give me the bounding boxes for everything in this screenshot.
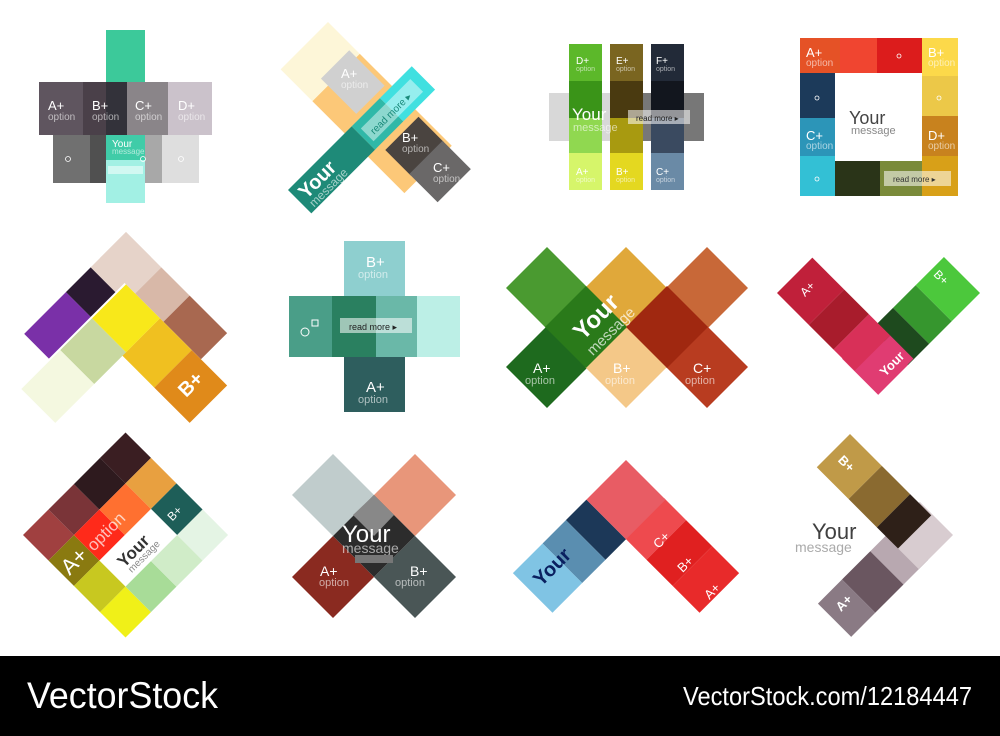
panel: graphic 2 crossing bands xyxy=(281,22,473,214)
panel: graphic 7 diamond X: A+ xyxy=(533,360,551,376)
panel: graphic 8 V check: A+ xyxy=(797,279,818,299)
panel: graphic 1 horizontal tiles: option xyxy=(48,112,75,123)
panel: graphic 12 chevron right: B+ xyxy=(835,452,858,475)
panel: graphic 12 chevron right: A+ xyxy=(833,591,855,614)
panel: graphic 9 rotated square frame: message xyxy=(126,539,163,575)
panel: graphic 11 chevron red blue: Your xyxy=(529,544,576,591)
panel: graphic 8 V check: B+ xyxy=(931,267,951,288)
panel: graphic 3 vertical columns: Your xyxy=(572,105,607,124)
footer: watermark bar xyxy=(0,656,1000,736)
panel: graphic 6 plus cross: read more ▸ xyxy=(349,322,398,332)
panel: graphic 11 chevron red blue: B+ xyxy=(674,553,696,575)
panel: graphic 2 crossing bands: read more ▸ xyxy=(369,91,414,137)
panel: graphic 3 vertical columns: message xyxy=(573,122,618,134)
panel: graphic 4 square frame: option xyxy=(928,58,955,69)
footer: watermark bar: VectorStock xyxy=(27,675,218,716)
panel: graphic 4 square frame: option xyxy=(928,141,955,152)
panel: graphic 7 diamond X: option xyxy=(605,375,635,387)
panel: graphic 10 four diamonds: A+ xyxy=(320,563,338,579)
panel: graphic 3 vertical columns: option xyxy=(576,66,595,73)
panel: graphic 9 rotated square frame: option xyxy=(83,509,129,555)
panel: graphic 4 square frame: Your xyxy=(849,108,885,128)
panel: graphic 6 plus cross: option xyxy=(358,394,388,406)
panel: graphic 1 horizontal tiles: A+ xyxy=(48,98,64,113)
panel: graphic 3 vertical columns: option xyxy=(616,177,635,184)
panel: graphic 9 rotated square frame: B+ xyxy=(164,503,185,524)
panel: graphic 9 rotated square frame: A+ xyxy=(56,542,93,580)
panel: graphic 10 four diamonds: option xyxy=(319,577,349,589)
panel: graphic 2 crossing bands: Your xyxy=(294,157,341,203)
panel: graphic 2 crossing bands: option xyxy=(433,174,460,185)
panel: graphic 10 four diamonds xyxy=(292,454,456,618)
panel: graphic 2 crossing bands: option xyxy=(341,80,368,91)
panel: graphic 1 horizontal tiles: option xyxy=(135,112,162,123)
panel: graphic 3 vertical columns: option xyxy=(656,177,675,184)
panel: graphic 3 vertical columns: A+ xyxy=(576,167,589,178)
panel: graphic 3 vertical columns: B+ xyxy=(616,167,629,178)
panel: graphic 11 chevron red blue xyxy=(513,460,740,687)
panel: graphic 7 diamond X: message xyxy=(584,304,639,359)
panel: graphic 4 square frame xyxy=(800,38,958,196)
panel: graphic 9 rotated square frame xyxy=(23,432,228,638)
panel: graphic 6 plus cross: B+ xyxy=(366,254,385,271)
panel: graphic 3 vertical columns: read more ▸ xyxy=(636,114,679,123)
panel: graphic 1 horizontal tiles: D+ xyxy=(178,98,195,113)
panel: graphic 7 diamond X: C+ xyxy=(693,360,711,376)
panel: graphic 12 chevron right xyxy=(795,434,953,637)
panel: graphic 6 plus cross xyxy=(289,241,460,412)
panel: graphic 8 V check: Your xyxy=(877,348,907,379)
panel: graphic 1 horizontal tiles: message xyxy=(112,147,145,156)
panel: graphic 4 square frame: read more ▸ xyxy=(893,175,936,184)
panel: graphic 3 vertical columns: E+ xyxy=(616,56,629,67)
panel: graphic 10 four diamonds: option xyxy=(395,577,425,589)
panel: graphic 4 square frame: C+ xyxy=(806,128,823,143)
panel: graphic 4 square frame: option xyxy=(806,58,833,69)
panel: graphic 1 horizontal tiles: B+ xyxy=(92,98,108,113)
panel: graphic 1 horizontal tiles xyxy=(39,30,212,203)
panel: graphic 10 four diamonds: message xyxy=(342,540,399,556)
panel: graphic 7 diamond X: Your xyxy=(568,289,625,345)
panel: graphic 4 square frame: message xyxy=(851,125,896,137)
panel: graphic 2 crossing bands: A+ xyxy=(341,66,357,81)
panel: graphic 9 rotated square frame: Your xyxy=(114,531,154,571)
panel: graphic 6 plus cross: A+ xyxy=(366,379,385,396)
panel: graphic 11 chevron red blue: C+ xyxy=(650,529,673,551)
panel: graphic 4 square frame: B+ xyxy=(928,45,944,60)
panel: graphic 7 diamond X: option xyxy=(525,375,555,387)
panel: graphic 1 horizontal tiles: option xyxy=(92,112,119,123)
panel: graphic 2 crossing bands: C+ xyxy=(433,160,450,175)
panel: graphic 1 horizontal tiles: Your xyxy=(112,139,133,150)
panel: graphic 12 chevron right: message xyxy=(795,539,852,555)
panel: graphic 8 V check xyxy=(777,257,980,395)
panel: graphic 2 crossing bands: message xyxy=(306,165,351,210)
panel: graphic 3 vertical columns xyxy=(549,44,704,190)
panel: graphic 10 four diamonds: Your xyxy=(342,521,390,548)
panel: graphic 12 chevron right: Your xyxy=(812,519,856,544)
panel: graphic 11 chevron red blue: A+ xyxy=(701,580,723,602)
panel: graphic 3 vertical columns: option xyxy=(616,66,635,73)
panel: graphic 7 diamond X: option xyxy=(685,375,715,387)
panel: graphic 4 square frame: A+ xyxy=(806,45,822,60)
panel: graphic 4 square frame: D+ xyxy=(928,128,945,143)
panel: graphic 1 horizontal tiles: option xyxy=(178,112,205,123)
panel: graphic 7 diamond X xyxy=(506,247,748,408)
panel: graphic 5 chevron up xyxy=(0,232,253,490)
panel: graphic 10 four diamonds: B+ xyxy=(410,563,428,579)
panel: graphic 3 vertical columns: C+ xyxy=(656,167,669,178)
panel: graphic 6 plus cross: option xyxy=(358,269,388,281)
panel: graphic 3 vertical columns: option xyxy=(576,177,595,184)
panel: graphic 3 vertical columns: option xyxy=(656,66,675,73)
panel: graphic 7 diamond X: B+ xyxy=(613,360,631,376)
panel: graphic 1 horizontal tiles: C+ xyxy=(135,98,152,113)
footer: watermark bar: VectorStock.com/12184447 xyxy=(683,681,972,711)
panel: graphic 3 vertical columns: D+ xyxy=(576,56,589,67)
panel: graphic 2 crossing bands: option xyxy=(402,144,429,155)
panel: graphic 2 crossing bands: B+ xyxy=(402,130,418,145)
panel: graphic 4 square frame: option xyxy=(806,141,833,152)
panel: graphic 3 vertical columns: F+ xyxy=(656,56,668,67)
panel: graphic 5 chevron up: B+ xyxy=(174,368,208,402)
